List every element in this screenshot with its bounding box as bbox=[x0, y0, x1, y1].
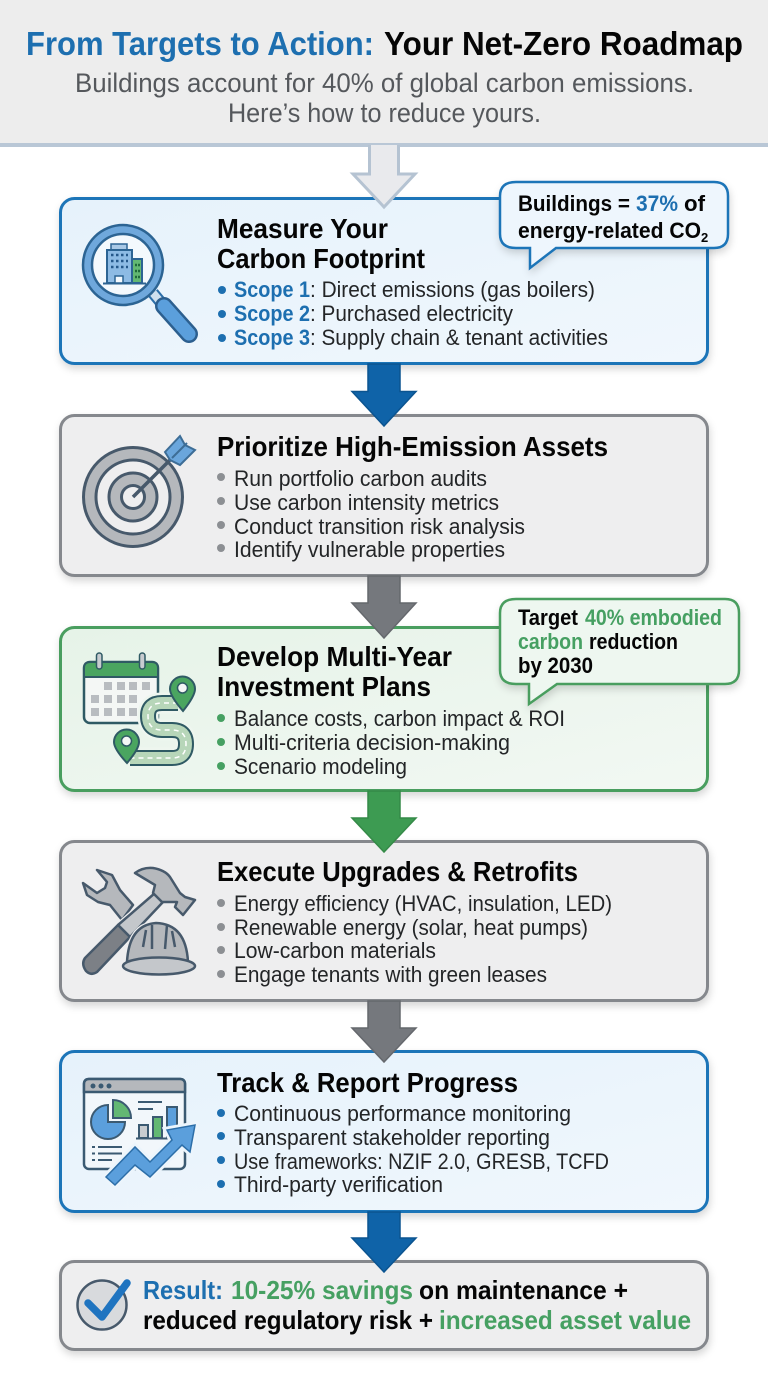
arrow: header to measure bbox=[353, 145, 415, 207]
panel: execute upgrades bbox=[60, 842, 708, 1000]
heading: Track & Report Progress bbox=[217, 1067, 518, 1098]
bullet list: Continuous performance monitoring bbox=[234, 1101, 571, 1126]
bullet list: Transparent stakeholder reporting bbox=[234, 1125, 550, 1150]
heading: Measure Your bbox=[217, 213, 388, 244]
callout: buildings 37%: 2 bbox=[701, 230, 708, 245]
callout: buildings 37% bbox=[500, 182, 728, 268]
arrow: prioritize to plans bbox=[352, 576, 416, 638]
bullet list: Scope 1 bbox=[234, 277, 310, 302]
bullet list bbox=[217, 466, 525, 562]
title: From Targets to Action: bbox=[26, 25, 374, 62]
bullet list: : Purchased electricity bbox=[310, 301, 513, 326]
panel: investment plans bbox=[60, 628, 708, 790]
heading: Execute Upgrades & Retrofits bbox=[217, 856, 578, 887]
callout: 40% embodied carbon bbox=[500, 599, 739, 704]
bullet list: Run portfolio carbon audits bbox=[234, 466, 487, 491]
panel: track and report bbox=[60, 1052, 708, 1212]
bullet list bbox=[218, 277, 608, 350]
bullet list: Identify vulnerable properties bbox=[234, 537, 505, 562]
subtitle: Buildings account for 40% of global carbon emissions. bbox=[75, 68, 694, 98]
heading bbox=[217, 213, 425, 274]
result text bbox=[143, 1275, 691, 1335]
heading: Carbon Footprint bbox=[217, 243, 425, 274]
callout: 40% embodied carbon: carbon bbox=[518, 629, 583, 654]
callout: 40% embodied carbon: reduction bbox=[589, 629, 678, 654]
callout: buildings 37%: of bbox=[684, 191, 706, 216]
callout: buildings 37%: energy-related CO bbox=[518, 218, 701, 243]
bullet list: Low-carbon materials bbox=[234, 938, 436, 963]
title: Your Net-Zero Roadmap bbox=[384, 25, 743, 62]
icon: magnifier over building bbox=[83, 225, 189, 334]
panel: measure carbon footprint bbox=[60, 198, 708, 364]
result text: on maintenance + bbox=[419, 1275, 628, 1305]
arrow: track to result bbox=[352, 1212, 416, 1272]
result text: Result: bbox=[143, 1275, 223, 1305]
icon: target with arrow bbox=[84, 436, 195, 546]
callout: 40% embodied carbon: 40% embodied bbox=[585, 605, 722, 630]
bullet list bbox=[217, 891, 612, 987]
heading: Investment Plans bbox=[217, 671, 431, 702]
subtitle: Here’s how to reduce yours. bbox=[228, 98, 541, 128]
panel: prioritize assets bbox=[60, 416, 708, 576]
bullet list: Energy efficiency (HVAC, insulation, LED) bbox=[234, 891, 612, 916]
arrow: measure to prioritize bbox=[352, 364, 416, 426]
arrow: execute to track bbox=[352, 1001, 416, 1062]
bullet list: Scope 3 bbox=[234, 325, 310, 350]
icon: check mark bbox=[78, 1280, 127, 1330]
result text: 10-25% savings bbox=[231, 1275, 413, 1305]
title bbox=[26, 25, 743, 62]
result text: reduced regulatory risk + bbox=[143, 1305, 433, 1335]
icon: dashboard with rising arrow bbox=[84, 1079, 195, 1185]
arrow: plans to execute bbox=[352, 791, 416, 852]
panel: result bbox=[60, 1262, 708, 1350]
bullet list: : Direct emissions (gas boilers) bbox=[310, 277, 595, 302]
bullet list: : Supply chain & tenant activities bbox=[310, 325, 608, 350]
subtitle bbox=[75, 68, 694, 128]
bullet list: Scenario modeling bbox=[234, 754, 407, 779]
bullet list: Engage tenants with green leases bbox=[234, 962, 547, 987]
bullet list: Balance costs, carbon impact & ROI bbox=[234, 706, 565, 731]
icon: calendar and route bbox=[84, 653, 195, 763]
callout: buildings 37%: Buildings = bbox=[518, 191, 630, 216]
heading: Develop Multi-Year bbox=[217, 641, 452, 672]
result text: increased asset value bbox=[439, 1305, 691, 1335]
bullet list bbox=[217, 1101, 609, 1197]
header band bbox=[0, 0, 768, 147]
icon: wrench, hammer and hard hat bbox=[83, 868, 195, 974]
bullet list: Conduct transition risk analysis bbox=[234, 514, 525, 539]
bullet list: Renewable energy (solar, heat pumps) bbox=[234, 915, 588, 940]
bullet list: Third-party verification bbox=[234, 1172, 443, 1197]
bullet list: Scope 2 bbox=[234, 301, 310, 326]
callout: buildings 37%: 37% bbox=[636, 191, 678, 216]
bullet list: Use frameworks: NZIF 2.0, GRESB, TCFD bbox=[234, 1149, 609, 1174]
callout: 40% embodied carbon: by 2030 bbox=[518, 653, 593, 678]
heading bbox=[217, 641, 452, 702]
bullet list bbox=[217, 706, 565, 779]
callout: 40% embodied carbon: Target bbox=[518, 605, 579, 630]
bullet list: Use carbon intensity metrics bbox=[234, 490, 499, 515]
heading: Prioritize High-Emission Assets bbox=[217, 431, 608, 462]
bullet list: Multi-criteria decision-making bbox=[234, 730, 510, 755]
